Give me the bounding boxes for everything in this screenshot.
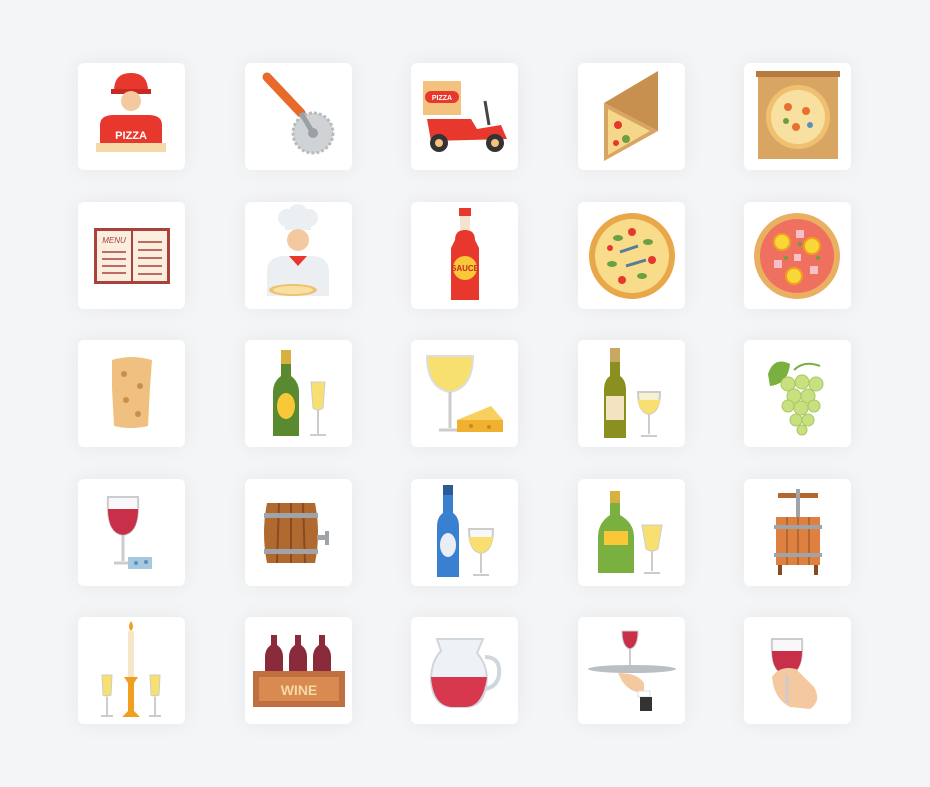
tile: cork bbox=[78, 340, 185, 447]
tile: blue bottle bbox=[411, 479, 518, 586]
tile: olive bottle bbox=[578, 340, 685, 447]
tile: pizza 2 bbox=[744, 202, 851, 309]
tile: red wine and blue cheese bbox=[78, 479, 185, 586]
tile: wine press bbox=[744, 479, 851, 586]
tile: pizza delivery man: PIZZA bbox=[115, 130, 147, 142]
tile: jug bbox=[411, 617, 518, 724]
tile: wine crate bbox=[245, 617, 352, 724]
tile: pizza delivery man bbox=[78, 63, 185, 170]
tile: menu bbox=[78, 202, 185, 309]
tile: green bottle bbox=[578, 479, 685, 586]
tile: pizza slice box bbox=[578, 63, 685, 170]
tile: waiter tray bbox=[578, 617, 685, 724]
tile: menu: MENU bbox=[102, 236, 126, 245]
tile: sauce bottle bbox=[411, 202, 518, 309]
tile: wine crate: WINE bbox=[281, 682, 317, 698]
tile: pizza cutter bbox=[245, 63, 352, 170]
tile: champagne bbox=[245, 340, 352, 447]
tile: candle and glasses bbox=[78, 617, 185, 724]
tile: grapes bbox=[744, 340, 851, 447]
tile: barrel bbox=[245, 479, 352, 586]
tile: pizza box bbox=[744, 63, 851, 170]
tile: white wine and cheese bbox=[411, 340, 518, 447]
tile: sauce bottle: SAUCE bbox=[451, 264, 480, 273]
tile: delivery scooter: PIZZA bbox=[432, 95, 452, 102]
tile: chef bbox=[245, 202, 352, 309]
tile: delivery scooter bbox=[411, 63, 518, 170]
tile: pizza 1 bbox=[578, 202, 685, 309]
tile: hand with wine glass bbox=[744, 617, 851, 724]
